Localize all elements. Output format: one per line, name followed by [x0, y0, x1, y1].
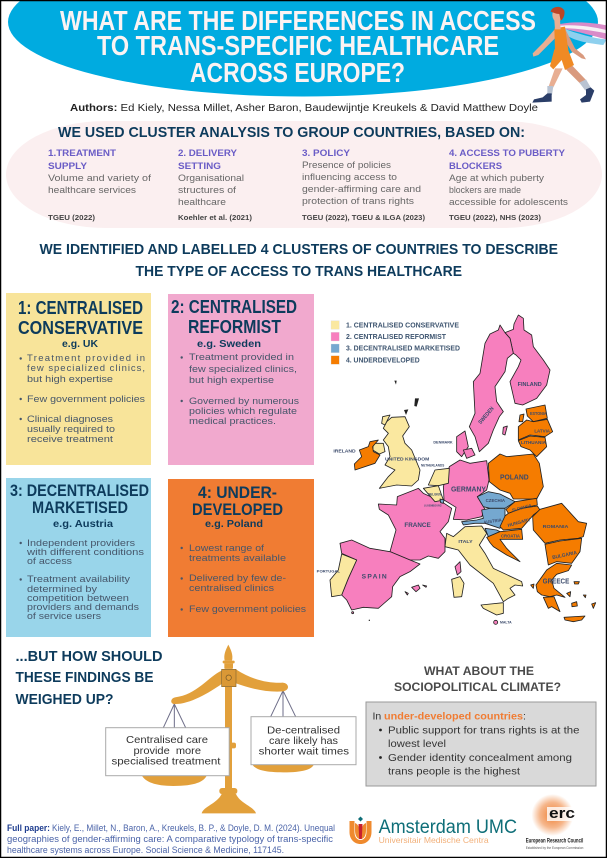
criterion 4: access to puberty blockers: blockers are made — [449, 185, 521, 195]
heading: sociopolitical climate — [394, 666, 561, 694]
map country labels: CROATIA — [501, 534, 521, 539]
cluster 4 bullet list: Lowest range of — [189, 543, 264, 554]
full paper citation: Full paper: — [7, 823, 50, 833]
criterion 3: policy: Presence of policies — [302, 160, 392, 170]
cluster 4 bullet list: Delivered by few de- — [189, 573, 286, 584]
map shapes: yellow cluster countries — [330, 415, 523, 615]
panel: cluster 3 decentralised marketised — [6, 478, 151, 637]
logo: Amsterdam UMC: Universitair Medische Centra — [379, 835, 489, 845]
map small northern islands — [369, 381, 419, 621]
callout: de-centralised care — [251, 717, 356, 765]
panel: sociopolitical climate findings: Gender identity concealment among — [388, 752, 572, 764]
map legend: 4. UNDERDEVELOPED — [346, 356, 420, 365]
cluster 3 bullet list: determined by — [27, 584, 97, 595]
cluster 4 bullet list: centralised clinics — [189, 583, 274, 594]
criterion 3: policy — [302, 148, 426, 222]
map country labels: PORTUGAL — [317, 568, 341, 573]
panel: cluster 1 centralised conservative — [6, 293, 151, 465]
panel: sociopolitical climate findings: trans people is the highest — [388, 766, 520, 778]
full paper citation: Kiely, E., Millet, N., Baron, A., Kreukels, B. P., & Doyle, D. M. (2024). Unequal — [52, 823, 335, 833]
callout: centralised care: specialised treatment — [112, 756, 221, 768]
cluster 1 heading: 1: CENTRALISED — [18, 297, 143, 318]
cluster 2 bullet list: Treatment provided in — [189, 352, 294, 363]
map shapes: orange cluster countries — [354, 405, 596, 622]
criterion 2: delivery setting: SETTING — [178, 161, 221, 172]
map country labels: SPAIN — [362, 574, 387, 581]
criterion 2: delivery setting: 2. DELIVERY — [178, 148, 238, 159]
cluster 3 bullet list: Treatment availability — [27, 574, 130, 585]
map country labels: LATVIA — [534, 429, 551, 434]
criterion 1: treatment supply: healthcare services — [48, 185, 137, 195]
map country labels: SWEDEN — [478, 406, 496, 426]
heading: how should findings be weighed: ...BUT HOW SHOULD — [16, 648, 163, 665]
criterion 3: policy: influencing access to — [302, 172, 397, 182]
heading: sociopolitical climate: WHAT ABOUT THE — [424, 666, 534, 678]
cluster 3 bullet list: Independent providers — [27, 538, 135, 549]
cluster 2 bullet list: medical practices. — [189, 416, 276, 427]
cluster 1 heading — [18, 297, 143, 350]
map shapes: pink cluster countries — [340, 315, 550, 624]
cluster 3 heading: 3: DECENTRALISED — [10, 481, 149, 500]
full paper citation: healthcare systems across Europe. Social Science & Medicine, 117145. — [7, 845, 284, 855]
cluster 3 bullet list: with different conditions — [26, 547, 144, 558]
callout: de-centralised care: De-centralised — [267, 725, 340, 737]
cluster 1 bullet list: usually required to — [27, 424, 115, 435]
map legend: 2. CENTRALISED REFORMIST — [346, 332, 446, 341]
panel: sociopolitical climate findings: Public support for trans rights is at the — [388, 724, 580, 736]
callout: de-centralised care: shorter wait times — [259, 746, 349, 758]
cluster 2 heading: e.g. Sweden — [197, 339, 261, 350]
criterion 4: access to puberty blockers: 4. ACCESS TO PUBERTY — [449, 148, 566, 159]
criterion 2: delivery setting: healthcare — [178, 197, 226, 207]
authors line: Authors: Ed Kiely, Nessa Millet, Asher Baron, Baudewijntje Kreukels & David Matthew Doyle — [70, 102, 538, 114]
cluster 4 heading: e.g. Poland — [205, 519, 263, 530]
map country labels — [317, 382, 578, 625]
logo: Amsterdam UMC: Amsterdam UMC — [379, 817, 517, 838]
Amsterdam UMC icon — [350, 816, 372, 844]
criterion 3: policy: gender-affirming care and — [302, 184, 421, 194]
map country labels: LUXEMBOURG — [424, 504, 442, 508]
map country labels: IRELAND — [333, 449, 356, 454]
map shapes: blue cluster countries — [440, 492, 515, 537]
cluster 3 bullet list: providers and demands — [27, 602, 139, 613]
panel: cluster 4 under-developed — [168, 479, 314, 637]
map country labels: GREECE — [543, 579, 570, 586]
cluster 1 bullet list: Treatment provided in — [27, 353, 145, 364]
map country labels: UNITED KINGDOM — [385, 456, 429, 462]
map legend — [331, 321, 460, 365]
map country labels: BULGARIA — [552, 550, 578, 561]
cluster 2 bullet list: but high expertise — [189, 375, 274, 386]
title banner: TO TRANS-SPECIFIC HEALTHCARE — [97, 30, 499, 61]
cluster 3 bullet list — [20, 538, 144, 622]
criterion 2: delivery setting: structures of — [178, 185, 237, 195]
criterion 1: treatment supply: 1.TREATMENT — [48, 148, 116, 159]
map country labels: HUNGARY — [507, 517, 532, 528]
panel: sociopolitical climate findings: under-developed countries — [384, 710, 523, 722]
heading: sociopolitical climate: SOCIOPOLITICAL CLIMATE? — [394, 682, 561, 694]
map country labels: POLAND — [500, 475, 529, 482]
map country labels: GERMANY — [451, 487, 486, 494]
cluster 4 bullet list — [180, 543, 306, 615]
criterion 2: delivery setting: Organisational — [178, 173, 244, 183]
cluster 1 bullet list: few specialized clinics, — [27, 363, 145, 374]
icon: walking person with trans flag cape — [532, 7, 607, 103]
map country labels: NETHERLANDS — [421, 463, 445, 467]
panel: cluster analysis criteria — [6, 121, 602, 228]
cluster 1 bullet list: but high expertise — [27, 374, 113, 385]
cluster 4 bullet list: Few government policies — [189, 604, 306, 615]
cluster 1 heading: e.g. UK — [62, 339, 99, 350]
cluster 2 heading: 2: CENTRALISED — [171, 296, 297, 317]
cluster 2 heading: REFORMIST — [188, 316, 282, 337]
criterion 3: policy: TGEU (2022), TGEU & ILGA (2023) — [302, 213, 426, 222]
callout: de-centralised care: care likely has — [269, 735, 338, 747]
panel: sociopolitical climate findings — [366, 702, 596, 786]
cluster 3 bullet list: of service users — [27, 611, 101, 622]
map of Europe with legend — [317, 315, 596, 625]
cluster 2 bullet list: policies which regulate — [189, 406, 297, 417]
panel: sociopolitical climate findings: In — [372, 710, 381, 722]
logo: Amsterdam UMC — [350, 816, 517, 845]
criterion 1: treatment supply: Volume and variety of — [48, 173, 152, 183]
criterion 3: policy: protection of trans rights — [302, 196, 415, 206]
cluster 2 bullet list: few specialized clinics, — [189, 364, 297, 375]
map country labels: ROMANIA — [543, 524, 569, 530]
title banner — [8, 0, 598, 96]
callout: centralised care: Centralised care — [126, 734, 208, 746]
map country labels: FINLAND — [518, 382, 542, 388]
logo: European Research Council: Established by the European Commission — [526, 845, 583, 850]
heading: how should findings be weighed — [16, 648, 163, 708]
cluster 3 heading — [10, 481, 149, 530]
cluster 2 bullet list — [180, 352, 299, 427]
map legend: 1. CENTRALISED CONSERVATIVE — [346, 321, 459, 330]
criterion 4: access to puberty blockers: Age at which puberty — [449, 173, 545, 183]
callout: centralised care: provide more — [134, 745, 201, 757]
cluster 3 bullet list: of access — [27, 556, 72, 567]
cluster 4 heading — [192, 484, 283, 530]
heading: four clusters: WE IDENTIFIED AND LABELLED 4 CLUSTERS OF COUNTRIES TO DESCRIBE — [40, 241, 558, 258]
cluster 1 heading: CONSERVATIVE — [18, 317, 143, 338]
cluster 3 heading: MARKETISED — [32, 498, 128, 517]
logo: European Research Council: European Research Council — [526, 839, 584, 845]
full paper citation: geographies of gender-affirming care: A comparative typology of trans-specific — [7, 834, 334, 844]
criterion 1: treatment supply — [48, 148, 152, 222]
heading: how should findings be weighed: THESE FINDINGS BE — [16, 669, 154, 686]
cluster 1 bullet list: Few government policies — [27, 394, 145, 405]
cluster 3 bullet list: competition between — [27, 593, 129, 604]
map country labels: ESTONIA — [530, 411, 547, 416]
panel: sociopolitical climate findings: lowest level — [388, 738, 446, 750]
map country labels: AUSTRIA — [483, 517, 503, 525]
map country labels: DENMARK — [433, 440, 453, 444]
cluster 2 heading — [171, 296, 297, 350]
cluster 1 bullet list: Clinical diagnoses — [27, 414, 113, 425]
cluster 4 heading: 4: UNDER- — [198, 484, 277, 502]
logo: European Research Council: erc — [549, 805, 575, 822]
full paper citation — [7, 823, 335, 855]
criterion 1: treatment supply: SUPPLY — [48, 161, 88, 172]
cluster 2 bullet list: Governed by numerous — [189, 396, 299, 407]
map legend: 3. DECENTRALISED MARKETISED — [346, 344, 460, 353]
cluster 1 bullet list: receive treatment — [27, 434, 113, 445]
ERC dotted burst — [532, 794, 577, 836]
map country labels: BELGIUM — [428, 493, 442, 497]
callout: centralised care — [106, 728, 229, 776]
map country labels: ITALY — [458, 539, 473, 545]
cluster 3 heading: e.g. Austria — [53, 519, 113, 530]
map country labels: SLOVAKIA — [511, 503, 533, 513]
panel: sociopolitical climate findings: : — [523, 710, 526, 722]
panel: cluster 2 centralised reformist — [168, 294, 314, 465]
map country labels: LITHUANIA — [521, 440, 547, 445]
icon: balance scale — [142, 645, 314, 813]
criterion 1: treatment supply: TGEU (2022) — [48, 213, 96, 222]
map country labels: FRANCE — [404, 522, 431, 529]
criterion 2: delivery setting: Koehler et al. (2021) — [178, 213, 253, 222]
cluster 4 bullet list: treatments available — [189, 553, 286, 564]
criterion 4: access to puberty blockers: BLOCKERS — [449, 161, 502, 172]
map country labels: CZECHIA — [486, 498, 506, 503]
title banner: ACROSS EUROPE? — [190, 57, 405, 88]
criterion 4: access to puberty blockers: accessible for adolescents — [449, 197, 569, 207]
criterion 4: access to puberty blockers: TGEU (2022), NHS (2023) — [449, 213, 542, 222]
criterion 2: delivery setting — [178, 148, 253, 222]
cluster 1 bullet list — [20, 353, 145, 445]
logo: European Research Council — [526, 794, 584, 850]
cluster 4 heading: DEVELOPED — [192, 501, 283, 519]
criterion 4: access to puberty blockers — [449, 148, 569, 222]
heading: four clusters — [40, 241, 558, 280]
heading: cluster analysis: WE USED CLUSTER ANALYSIS TO GROUP COUNTRIES, BASED ON: — [58, 124, 525, 141]
criterion 3: policy: 3. POLICY — [302, 148, 351, 159]
map country labels: MALTA — [500, 621, 512, 625]
heading: four clusters: THE TYPE OF ACCESS TO TRANS HEALTHCARE — [136, 263, 462, 280]
heading: how should findings be weighed: WEIGHED UP? — [16, 691, 114, 708]
